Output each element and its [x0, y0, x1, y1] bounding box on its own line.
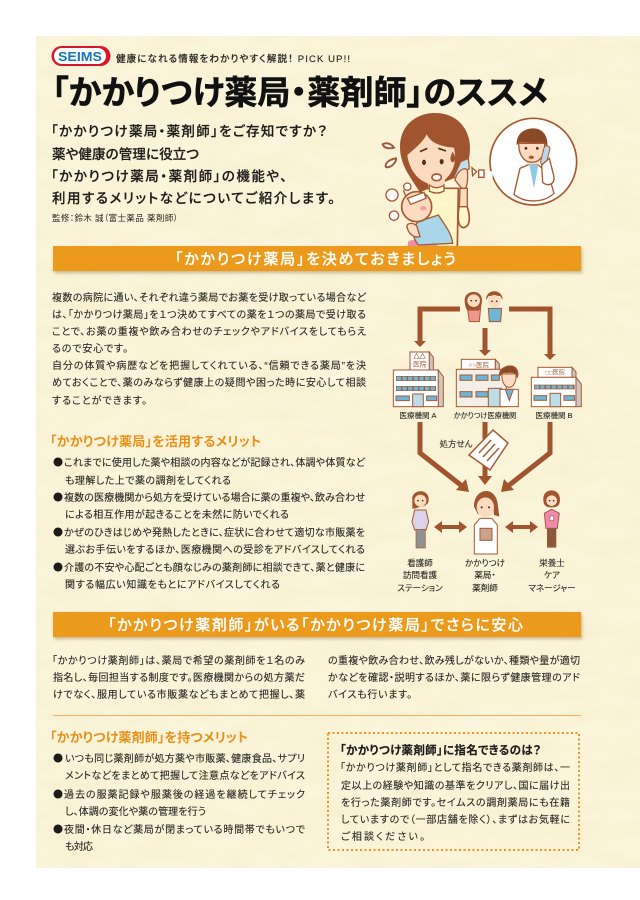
text block: pharmacist description: かなどを確認・説明するほか、薬に限らず健康管理のアド: [328, 671, 580, 684]
intro text: 「かかりつけ薬局・薬剤師」の機能や、: [51, 169, 287, 184]
list: pharmacy merits: ●: [53, 559, 63, 574]
callout title: 「かかりつけ薬剤師」に指名できるのは？: [340, 743, 541, 757]
list: pharmacy merits: かぜのひきはじめや発熱したときに、症状に合わせて適切な市販薬を: [64, 526, 365, 539]
callout text: [340, 761, 570, 843]
icon: baby: [386, 183, 453, 247]
supervisor credit: 監修：鈴木 誠（富士薬品 薬剤師）: [52, 213, 178, 223]
list: pharmacist merits: ●: [53, 821, 63, 836]
banner: かかりつけ薬剤師がいるかかりつけ薬局でさらに安心: 「かかりつけ薬剤師」がいる「かかりつけ薬局」でさらに安心: [108, 616, 523, 634]
list: pharmacy merits: も理解した上で薬の調剤をしてくれる: [65, 474, 231, 487]
arrows: pharmacist to care team: [434, 521, 538, 533]
hospital labels: かかりつけ医療機関: [454, 411, 516, 420]
list: pharmacist merits: ●: [53, 750, 63, 765]
diagram: patient, clinics and pharmacy flow: [393, 291, 581, 593]
icon: family clinic with doctor: [456, 359, 518, 407]
list: pharmacist merits: メントなどをまとめて把握して注意点などをアドバイス: [65, 769, 305, 782]
list: pharmacist merits: 夜間・休日など薬局が閉まっている時間帯でもいつで: [64, 823, 305, 836]
intro text: 薬や健康の管理に役立つ: [52, 146, 199, 162]
list: pharmacist merits: ●: [53, 786, 63, 801]
labels: care team: [397, 558, 576, 593]
labels: care team: かかりつけ: [465, 558, 505, 568]
labels: care team: 看護師: [407, 558, 433, 568]
text block: pharmacy description: することができます。: [51, 394, 147, 407]
label: prescription: 処方せん: [439, 439, 473, 449]
icon: hospital B: □□医院: [545, 369, 565, 377]
list: pharmacy merits: 介護の不安や心配ごとも顔なじみの薬剤師に相談できて、薬と健康に: [64, 561, 365, 574]
list: pharmacist merits: [53, 750, 305, 853]
callout text: 「かかりつけ薬剤師」として指名できる薬剤師は、一: [340, 761, 570, 774]
labels: care team: 薬剤師: [472, 583, 498, 593]
text block: pharmacist description: バイスも行います。: [328, 688, 412, 701]
text block: pharmacy description: [51, 291, 367, 407]
callout text: ご相談ください。: [341, 830, 425, 843]
text block: pharmacy description: ことで、お薬の重複や飲み合わせのチェックやアドバイスをしてもらえ: [52, 325, 367, 338]
list: pharmacy merits: による相互作用が起きることを未然に防いでくれる: [65, 508, 289, 521]
text block: pharmacy description: るので安心です。: [52, 343, 128, 355]
list: pharmacist merits: 過去の服薬記録や服薬後の経過を継続してチェック: [64, 788, 305, 801]
list: pharmacist merits: も対応: [65, 840, 93, 853]
illustration: mother phoning pharmacist with sick baby: [383, 113, 577, 247]
callout text: 定以上の経験や知識の基準をクリアし、国に届け出: [341, 779, 570, 792]
list: pharmacy merits: ●: [53, 524, 63, 539]
heading: pharmacy merits: 「かかりつけ薬局」を活用するメリット: [50, 434, 261, 449]
logo: SEIMS: SEIMS: [58, 49, 102, 64]
labels: care team: 栄養士: [539, 558, 565, 568]
intro text: 「かかりつけ薬局・薬剤師」をご存知ですか？: [51, 123, 327, 139]
icon: hospital A: [393, 352, 443, 407]
list: pharmacist merits: いつも同じ薬剤師が処方薬や市販薬、健康食品、サプリ: [65, 752, 305, 765]
icon: hospital A: 医院: [413, 360, 427, 369]
arrows: patient to clinics: [420, 309, 550, 486]
arrowheads: [414, 341, 556, 492]
icon: family clinic with doctor: ○○医院: [469, 360, 489, 369]
labels: care team: マネージャー: [528, 583, 576, 593]
labels: care team: ステーション: [397, 583, 443, 593]
labels: care team: 訪問看護: [403, 570, 437, 580]
list: pharmacy merits: 複数の医療機関から処方を受けている場合に薬の重複や、飲み合わせ: [64, 491, 365, 504]
text block: pharmacist description: 「かかりつけ薬剤師」は、薬局で希望の薬剤師を１名のみ: [52, 654, 305, 667]
list: pharmacy merits: 選ぶお手伝いをするほか、医療機関への受診をアドバイスしてくれる: [65, 543, 365, 556]
text block: pharmacist description: けでなく、服用している市販薬などもまとめて把握し、薬: [53, 688, 305, 701]
icon: hospital A: △△: [414, 353, 426, 361]
heading: pharmacist merits: 「かかりつけ薬剤師」を持つメリット: [50, 730, 248, 745]
tagline: 健康になれる情報をわかりやすく解説！ PICK UP!!: [116, 53, 350, 65]
icon: patients: [465, 291, 503, 322]
text block: pharmacy description: は、「かかりつけ薬局」を１つ決めてすべての薬を１つの薬局で受け取る: [52, 309, 366, 321]
list: pharmacy merits: 関する幅広い知識をもとにアドバイスしてくれる: [65, 578, 280, 591]
hospital labels: 医療機関 A: [399, 410, 437, 420]
intro text: [51, 123, 335, 206]
text block: pharmacy description: めておくことで、薬のみならず健康上の疑問や困った時に安心して相談: [52, 376, 366, 389]
text block: pharmacist description: [52, 654, 580, 701]
labels: care team: ケア: [544, 570, 560, 580]
list: pharmacy merits: これまでに使用した薬や相談の内容などが記録され、体調や体質など: [64, 456, 366, 469]
callout text: していますので（一部店舗を除く）、まずはお気軽に: [341, 813, 570, 826]
text block: pharmacy description: 自分の体質や病歴などを把握してくれている、“信頼できる薬局”を決: [52, 359, 366, 372]
text block: pharmacist description: の重複や飲み合わせ、飲み残しがないか、種類や量が適切: [328, 654, 580, 667]
logo: SEIMS: [52, 46, 110, 66]
callout text: を行った薬剤師です。セイムスの調剤薬局にも在籍: [341, 796, 570, 809]
hospital labels: 医療機関 B: [535, 410, 573, 420]
speech bubble with pharmacist: [472, 118, 577, 205]
banner: かかりつけ薬剤師がいるかかりつけ薬局でさらに安心: [53, 612, 581, 637]
icon: nurse: [412, 491, 429, 548]
icon: hospital B: [531, 367, 581, 407]
banner: かかりつけ薬局を決めておきましょう: [53, 246, 581, 271]
labels: care team: 薬局・: [474, 570, 496, 580]
icon: mother: [400, 113, 470, 247]
text block: pharmacist description: 指名し、毎回担当する制度です。医療機関からの処方薬だ: [53, 671, 305, 684]
banner: かかりつけ薬局を決めておきましょう: 「かかりつけ薬局」を決めておきましょう: [175, 251, 456, 268]
list: pharmacy merits: ●: [53, 454, 63, 469]
callout: who can be designated: [328, 733, 579, 850]
icon: nutritionist: [543, 490, 560, 547]
list: pharmacy merits: [53, 454, 366, 591]
list: pharmacy merits: ●: [53, 489, 63, 504]
title: 「かかりつけ薬局・薬剤師」のススメ: [52, 74, 548, 111]
icon: worry marks: [383, 143, 396, 167]
header: logo and tagline: [52, 46, 350, 66]
list: pharmacist merits: し、体調の変化や薬の管理を行う: [65, 805, 206, 818]
icon: pharmacist: [474, 491, 499, 554]
hospital labels: [399, 410, 573, 420]
intro text: 利用するメリットなどについてご紹介します。: [52, 190, 335, 206]
icon: prescription sheet: [469, 430, 508, 470]
text block: pharmacy description: 複数の病院に通い、それぞれ違う薬局でお薬を受け取っている場合など: [52, 291, 367, 304]
